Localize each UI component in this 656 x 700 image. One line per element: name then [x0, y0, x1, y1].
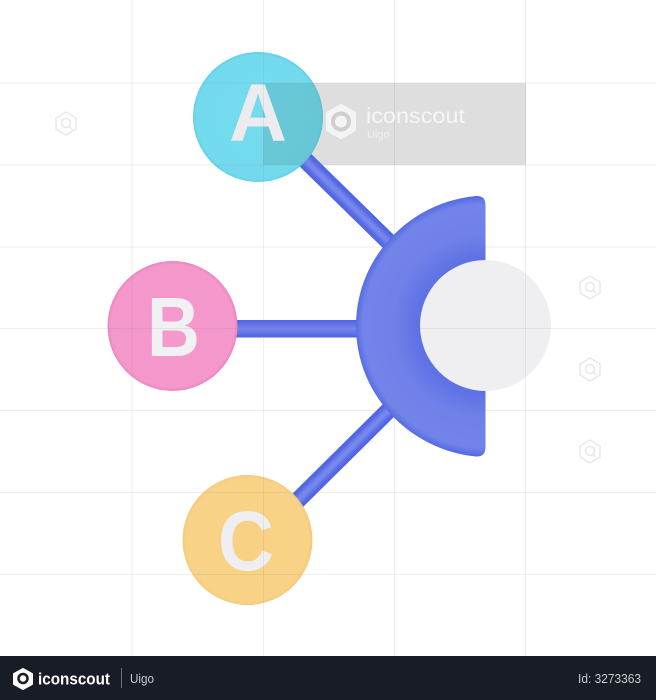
watermark text: iconscout: [366, 105, 465, 128]
footer brand: iconscout: [38, 670, 110, 688]
node A: [193, 52, 325, 182]
letter A: A: [229, 68, 287, 159]
watermark logo: [328, 106, 354, 137]
hub half disc: [356, 196, 486, 457]
watermark band: [263, 83, 526, 165]
hub white circle: [420, 260, 551, 391]
footer logo: [14, 669, 32, 689]
small watermark icon: [580, 440, 600, 463]
connector: B to hub: [232, 320, 362, 338]
small watermark icon: [56, 112, 76, 135]
watermark text: [366, 105, 465, 141]
small watermark icon: [580, 276, 600, 299]
footer id: Id: 3273363: [578, 671, 641, 686]
node B: [108, 261, 238, 391]
letter C: C: [218, 494, 274, 588]
connector: C to hub: [292, 407, 392, 506]
watermark text: Uigo: [367, 129, 390, 141]
footer divider: [121, 668, 122, 688]
letter B: B: [147, 280, 200, 374]
footer bar: [0, 656, 656, 700]
connector: A to hub: [296, 151, 392, 245]
node C: [182, 475, 312, 605]
small watermark icon: [580, 358, 600, 381]
footer author: Uigo: [130, 671, 154, 686]
node A shaded overlap: [263, 83, 325, 165]
